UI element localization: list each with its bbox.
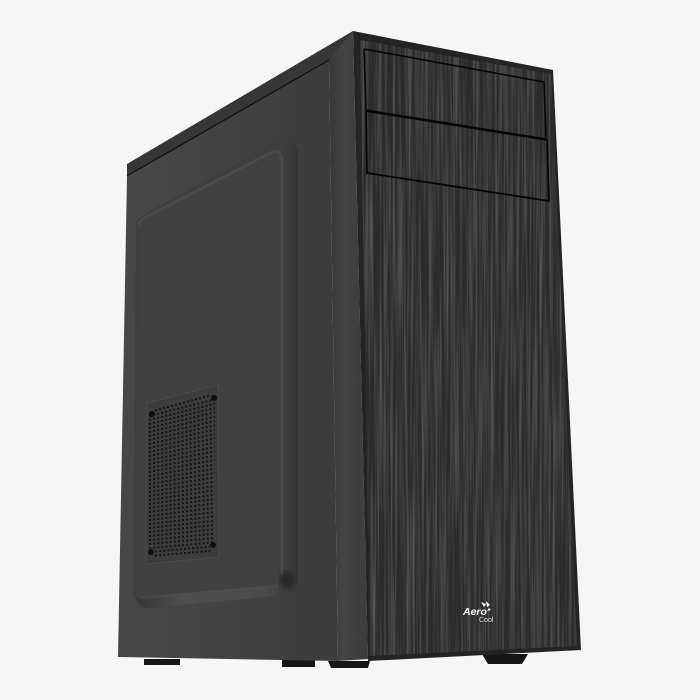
feet (144, 654, 528, 668)
side panel: embossed ridge (133, 139, 298, 608)
brand logo (462, 601, 494, 624)
case body: top surface (127, 31, 353, 177)
brand logo: Aero (462, 606, 488, 618)
case body: front corner bevel (329, 32, 368, 661)
front panel: upper drive bay (364, 49, 546, 139)
case body: front frame edge (353, 31, 581, 661)
front panel: lower drive bay (366, 111, 549, 201)
side panel: ventilation grille (146, 385, 219, 564)
logo: fan mark (481, 601, 491, 611)
product illustration: PC tower case (118, 31, 581, 668)
front panel: brushed wood texture (360, 40, 577, 656)
brand logo: Cool (479, 617, 494, 624)
case body: side panel (118, 60, 338, 661)
